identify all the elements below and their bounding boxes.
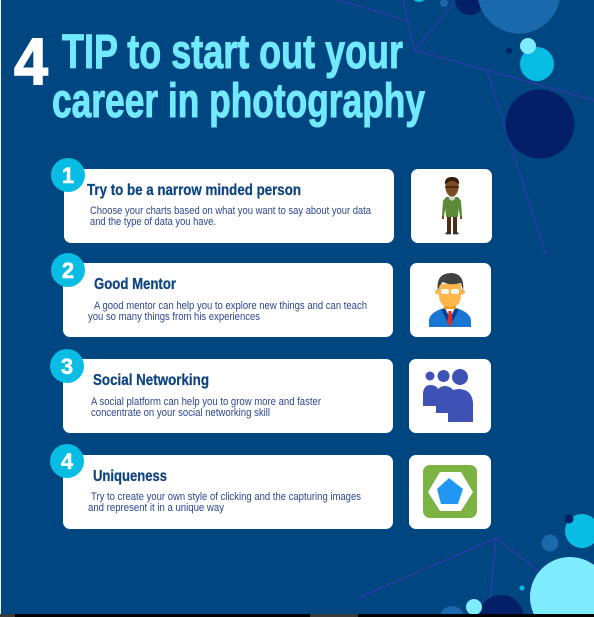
number badge 4 <box>50 444 84 478</box>
number badge 1: 1 <box>62 163 74 188</box>
decorative circles: bottom right <box>440 514 594 617</box>
title: TIP to start out your <box>62 26 403 79</box>
heading: tip 4: Uniqueness <box>93 468 167 485</box>
panel: tip 1 image <box>411 169 492 243</box>
number badge 2: 2 <box>62 258 74 283</box>
icon: mentor <box>429 273 471 327</box>
panel: tip 4 image <box>409 455 491 529</box>
panel: tip 3 <box>50 349 393 433</box>
title <box>52 26 425 128</box>
text: tip 2: A good mentor can help you to explore new things and can teach <box>94 300 367 312</box>
text: tip 1: and the type of data you have. <box>90 216 216 228</box>
panel: tip 3 image <box>409 359 491 433</box>
number badge 4: 4 <box>61 449 74 474</box>
icon: hexagon and pentagon <box>423 465 477 518</box>
text: tip 2 <box>88 300 367 323</box>
text: tip 4: Try to create your own style of clicking and the capturing images <box>91 491 361 503</box>
text: tip 3: concentrate on your social networking skill <box>91 407 270 419</box>
number badge 3 <box>50 349 84 383</box>
panel: tip 1 <box>51 158 394 243</box>
bottom bar <box>0 614 594 617</box>
text: tip 4: and represent it in a unique way <box>88 502 224 514</box>
number badge 2 <box>51 253 85 287</box>
number badge 3: 3 <box>61 354 73 379</box>
number badge 1 <box>51 158 85 192</box>
icon: man with glasses <box>442 177 462 234</box>
text: tip 2: you so many things from his experiences <box>88 311 260 323</box>
text: tip 4 <box>88 491 361 514</box>
text: tip 1: Choose your charts based on what you want to say about your data <box>90 205 372 217</box>
panel: tip 2 <box>51 253 393 337</box>
heading: tip 3: Social Networking <box>93 372 209 389</box>
icon: group of people <box>423 369 473 422</box>
heading: tip 1: Try to be a narrow minded person <box>87 182 301 199</box>
heading: tip 2: Good Mentor <box>94 276 176 293</box>
text: tip 1 <box>90 205 372 228</box>
panel: tip 4 <box>50 444 393 529</box>
decorative circles: top right <box>411 0 574 158</box>
text: tip 3: A social platform can help you to grow more and faster <box>91 396 321 408</box>
title number: 4 <box>14 24 48 98</box>
text: tip 3 <box>91 396 321 419</box>
panel: tip 2 image <box>410 263 491 337</box>
title: career in photography <box>52 75 425 128</box>
